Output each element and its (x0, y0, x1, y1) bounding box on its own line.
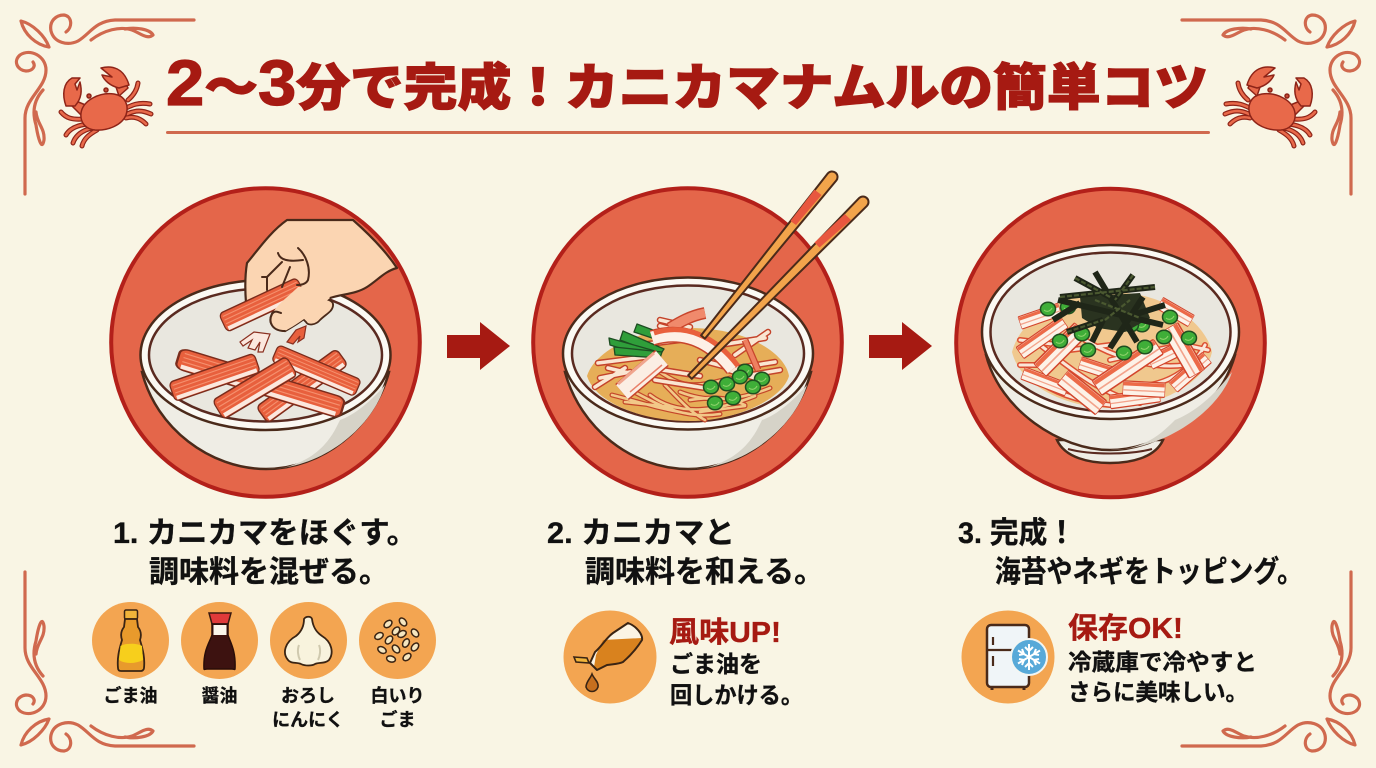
panel: step 3 illustration (956, 189, 1265, 497)
label: soy sauce: 醤油 (202, 686, 238, 706)
broth (587, 328, 789, 421)
corner ornament: bottom left (16, 572, 194, 751)
callout: flavor up: 風味UP! (669, 616, 781, 649)
text: step 2: 調味料を和える。 (585, 556, 824, 589)
noodle filler (1020, 340, 1208, 405)
text: step 1: 1. カニカマをほぐす。 (113, 517, 417, 550)
shredded strands (240, 326, 306, 352)
label: grated garlic: おろし (281, 686, 335, 706)
text: step 2: 2. カニカマと (547, 517, 735, 550)
arrow 1 (447, 322, 510, 370)
title: 2〜3分で完成！カニカマナムルの簡単コツ (166, 48, 1208, 119)
noodles upper (595, 320, 780, 388)
text: step 1 (113, 517, 417, 589)
nori (1053, 272, 1165, 348)
icon: crab right (1225, 67, 1315, 146)
panel: step 1 illustration (111, 188, 420, 497)
scallions (609, 324, 664, 358)
fingers behind stick (300, 299, 333, 324)
arrow 2 (869, 322, 932, 370)
callout: storage ok: さらに美味しい。 (1068, 679, 1248, 705)
corner ornament: top right (1182, 15, 1360, 194)
text: step 3 (958, 517, 1303, 589)
panel: step 2 illustration (533, 171, 869, 497)
corner ornament: top left (16, 15, 194, 194)
broth (1012, 292, 1212, 408)
callout: storage ok: 冷蔵庫で冷やすと (1068, 649, 1257, 675)
callout: flavor up (669, 616, 803, 708)
label: white sesame: 白いり (370, 686, 424, 706)
icon: sesame oil (92, 602, 169, 679)
label: sesame oil: ごま油 (104, 685, 158, 706)
crab sticks in bowl (169, 345, 361, 423)
icon: soy sauce (181, 602, 258, 679)
icon: pouring oil bottle (564, 610, 656, 704)
corner ornament: bottom right (1182, 572, 1360, 751)
callout: storage ok (1068, 612, 1257, 705)
peas (1040, 300, 1196, 360)
label: grated garlic: にんにく (272, 710, 344, 730)
thumb and finger lines (262, 248, 330, 331)
peas (704, 364, 770, 410)
bowl (140, 280, 390, 469)
icon: white sesame (359, 602, 436, 679)
hand (245, 220, 397, 331)
noodles lower (612, 372, 770, 420)
chopsticks (688, 171, 869, 379)
crab strips (1016, 297, 1211, 415)
callout: flavor up: ごま油を (670, 651, 762, 677)
text: step 1: 調味料を混ぜる。 (149, 556, 389, 589)
bowl (563, 278, 813, 469)
text: step 3: 3. 完成！ (958, 517, 1076, 550)
icon: crab left (61, 67, 151, 146)
icon: garlic (270, 602, 347, 679)
callout: flavor up: 回しかける。 (670, 682, 803, 708)
title underline (166, 131, 1210, 134)
label: grated garlic (272, 686, 344, 730)
label: white sesame: ごま (380, 709, 416, 730)
label: white sesame (370, 686, 424, 730)
callout: storage ok: 保存OK! (1068, 612, 1183, 645)
text: step 3: 海苔やネギをトッピング。 (995, 556, 1303, 589)
held crab stick (219, 278, 305, 332)
icon: fridge with snowflake (962, 610, 1054, 704)
text: step 2 (547, 517, 824, 589)
bowl (982, 245, 1239, 463)
crab strips (618, 313, 758, 392)
